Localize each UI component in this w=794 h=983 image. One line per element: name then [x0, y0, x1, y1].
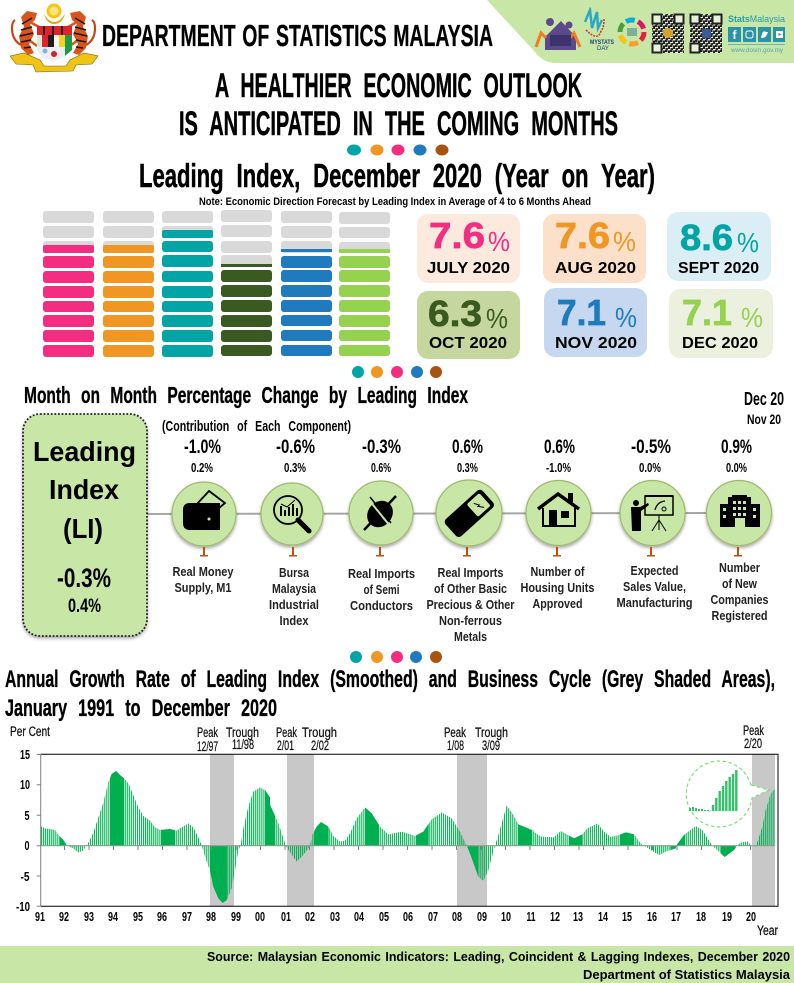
section heading: month on month: Month on Month Percentage Change by Leading Index — [24, 382, 468, 408]
card: July 2020: % — [488, 226, 510, 257]
component: Expected Sales Value, Manufacturing: 0.0% — [639, 460, 661, 475]
card: Nov 2020: NOV 2020 — [555, 335, 637, 352]
icon: presenter — [631, 495, 673, 531]
x axis labels: 05 — [379, 909, 389, 924]
component: Number of Housing Units Approved: 0.6% — [544, 437, 575, 458]
component: Bursa Malaysia Industrial Index: -0.6% — [276, 437, 315, 458]
icon: QR code one — [652, 14, 684, 53]
peak and trough labels: Trough — [302, 725, 337, 740]
gauge: November — [281, 211, 332, 356]
y axis labels: 0 — [24, 838, 30, 853]
component: Number of Housing Units Approved: Number of — [530, 565, 585, 579]
component: Number of New Companies Registered: Registered — [712, 609, 768, 623]
peak and trough labels: Trough — [226, 725, 259, 740]
x axis labels: 13 — [573, 909, 583, 924]
x axis labels: 00 — [255, 909, 265, 924]
axes — [37, 754, 778, 906]
card: Sept 2020 — [667, 212, 771, 281]
component: Real Imports of Other Basic Precious and Non-ferrous Metals: Non-ferrous — [439, 614, 502, 628]
component: Number of New Companies Registered: of New — [722, 577, 757, 591]
header title: DEPARTMENT OF STATISTICS MALAYSIA — [102, 18, 493, 53]
x axis labels: 01 — [281, 909, 291, 924]
section heading: annual growth rate: January 1991 to December 2020 — [5, 695, 277, 722]
component: Real Imports of Other Basic Precious and Non-ferrous Metals: 0.6% — [452, 437, 483, 458]
x axis labels: 19 — [722, 909, 732, 924]
x axis labels: 09 — [477, 909, 487, 924]
growth bars — [41, 771, 774, 903]
component: Number of New Companies Registered: Number — [719, 561, 760, 575]
icon: census logo — [536, 18, 580, 50]
peak and trough labels: Peak — [444, 725, 466, 740]
peak and trough labels: Peak — [276, 725, 297, 740]
x axis labels — [35, 909, 778, 938]
component: Bursa Malaysia Industrial Index: Index — [280, 614, 309, 628]
card: Dec 2020: DEC 2020 — [682, 335, 758, 352]
component: Real Imports of Semi Conductors: of Semi — [364, 583, 400, 597]
card: Aug 2020 — [543, 214, 646, 283]
peak and trough labels: 3/09 — [482, 738, 500, 753]
card: Oct 2020: % — [486, 303, 508, 334]
ribbon — [10, 53, 98, 72]
x axis labels: 94 — [108, 909, 119, 924]
gauge: October — [221, 210, 272, 356]
peak and trough labels: 2/20 — [744, 736, 762, 751]
component: Real Money Supply: 0.2% — [191, 460, 213, 475]
component: Number of Housing Units Approved: -1.0% — [546, 460, 571, 475]
panel: Leading Index total: 0.4% — [68, 596, 101, 617]
x axis labels: Year — [757, 923, 778, 938]
component: Number of Housing Units Approved: Approved — [532, 597, 582, 611]
StatsMalaysia social block — [728, 14, 786, 54]
component: Bursa Malaysia Industrial Index: Bursa — [279, 566, 310, 580]
card: July 2020 — [417, 214, 520, 283]
peak and trough labels: Peak — [197, 725, 218, 740]
component: Expected Sales Value, Manufacturing: Expected — [630, 564, 678, 578]
card: Sept 2020: 8.6 — [680, 217, 733, 258]
card: Nov 2020: % — [615, 302, 637, 333]
connector line — [147, 513, 708, 514]
x axis labels: 08 — [452, 909, 462, 924]
component: Real Imports of Semi Conductors: Conductors — [350, 599, 413, 613]
monthly cards — [417, 212, 773, 359]
component: Real Imports of Other Basic Precious and Non-ferrous Metals: 0.3% — [457, 460, 478, 475]
chart: leading index growth and business cycle — [10, 723, 778, 938]
component: Real Imports of Semi Conductors: -0.3% — [362, 437, 401, 458]
component: Real Imports of Other Basic Precious and Non-ferrous Metals: Real Imports — [438, 566, 504, 580]
footer band: Department of Statistics Malaysia — [583, 967, 791, 982]
component: Number of Housing Units Approved — [520, 437, 595, 611]
panel: Leading Index total: (LI) — [63, 513, 103, 544]
y axis labels: 15 — [20, 747, 30, 762]
card: July 2020: 7.6 — [429, 215, 485, 256]
icon: QR code two — [690, 14, 722, 53]
x axis labels: 97 — [182, 909, 192, 924]
y axis labels: 5 — [24, 808, 30, 823]
StatsMalaysia social block: f — [732, 28, 738, 42]
panel: Leading Index total: Index — [49, 474, 119, 505]
gauge: December — [339, 212, 390, 356]
component: Bursa Malaysia Industrial Index: Malaysia — [272, 582, 317, 596]
x axis labels: 17 — [671, 909, 681, 924]
x axis labels: 18 — [696, 909, 706, 924]
x axis labels: 92 — [59, 909, 69, 924]
component: Real Imports of Semi Conductors: Real Imports — [348, 567, 415, 581]
x axis labels: 11 — [526, 909, 536, 924]
icon: MyStats Day logo: MYSTATS — [590, 39, 615, 46]
callout: zoomed recent bars — [686, 761, 769, 827]
component: Real Imports of Semi Conductors: 0.6% — [371, 460, 391, 475]
StatsMalaysia social block: www.dosm.gov.my — [730, 48, 783, 54]
panel: Leading Index total: Leading — [33, 436, 136, 467]
right tiger — [68, 11, 95, 55]
x axis labels: 02 — [305, 909, 315, 924]
y axis labels: -10 — [16, 899, 30, 914]
component: Expected Sales Value, Manufacturing: Manufacturing — [616, 596, 692, 610]
component: Number of Housing Units Approved: Housing Units — [520, 581, 595, 595]
peak and trough labels: 2/01 — [277, 738, 294, 753]
component: Real Imports of Other Basic Precious and Non-ferrous Metals: Metals — [454, 630, 487, 644]
card: Sept 2020: SEPT 2020 — [678, 260, 759, 277]
x axis labels: 10 — [501, 909, 511, 924]
x axis labels: 03 — [330, 909, 340, 924]
x axis labels: 15 — [622, 909, 632, 924]
left tiger — [12, 11, 39, 55]
icon: semiconductor — [362, 496, 398, 532]
x axis labels: 91 — [35, 909, 45, 924]
card: Oct 2020: 6.3 — [428, 293, 482, 334]
icon: buildings — [720, 495, 760, 527]
peak and trough labels: Trough — [475, 725, 508, 740]
card: Dec 2020 — [669, 289, 773, 358]
card: Oct 2020 — [417, 291, 520, 359]
x axis labels: 93 — [84, 909, 94, 924]
card: Oct 2020: OCT 2020 — [429, 335, 507, 352]
component: Real Imports of Other Basic Precious and Non-ferrous Metals — [426, 437, 515, 644]
peak and trough labels — [197, 723, 764, 754]
shield — [37, 26, 72, 35]
x axis labels: 16 — [647, 909, 657, 924]
component: Real Imports of Other Basic Precious and Non-ferrous Metals: Precious & Other — [426, 598, 515, 612]
component: Bursa Malaysia Industrial Index: Industrial — [269, 598, 319, 612]
component: Number of New Companies Registered: Companies — [710, 593, 769, 607]
panel: Leading Index total — [23, 414, 147, 636]
component: Real Imports of Other Basic Precious and Non-ferrous Metals: of Other Basic — [434, 582, 507, 596]
icon: Malaysian coat of arms — [10, 4, 98, 72]
y axis labels: -5 — [20, 869, 30, 884]
panel: Leading Index total: -0.3% — [57, 563, 111, 593]
icon: SDG wheel — [620, 20, 644, 44]
gauge: September — [162, 211, 213, 357]
x axis labels: 95 — [133, 909, 143, 924]
decorative dots row one — [347, 144, 448, 156]
x axis labels: 99 — [231, 909, 241, 924]
legend: Dec 20 / Nov 20: Nov 20 — [747, 411, 781, 427]
component: Number of New Companies Registered — [706, 437, 772, 623]
component: Number of New Companies Registered: 0.9% — [721, 437, 752, 458]
peak and trough labels: Peak — [743, 723, 764, 738]
x axis labels: 12 — [550, 909, 560, 924]
component: Bursa Malaysia Industrial Index: 0.3% — [284, 460, 306, 475]
section heading: annual growth rate — [5, 666, 775, 722]
chart: leading index growth and business cycle: Per Cent — [10, 724, 50, 739]
component: Real Money Supply: Supply, M1 — [174, 581, 232, 595]
y axis labels — [16, 747, 30, 914]
component: Number of New Companies Registered: 0.0% — [726, 460, 747, 475]
decorative dots row two — [352, 366, 442, 378]
legend: Dec 20 / Nov 20 — [744, 389, 784, 427]
header green banner — [487, 0, 794, 63]
peak and trough labels: 11/98 — [232, 737, 254, 752]
card: July 2020: JULY 2020 — [427, 260, 510, 277]
card: Aug 2020: AUG 2020 — [555, 260, 636, 277]
card: Aug 2020: 7.6 — [555, 215, 610, 256]
gauge: July — [43, 211, 94, 357]
icon: magnifier chart — [274, 496, 309, 531]
card: Sept 2020: % — [737, 227, 759, 258]
recession bands — [210, 754, 775, 906]
header logos — [536, 10, 786, 54]
StatsMalaysia social block: StatsMalaysia — [728, 14, 786, 25]
footer band — [0, 946, 794, 983]
decorative dots row three — [350, 651, 442, 663]
card: Dec 2020: 7.1 — [682, 292, 732, 333]
component: Expected Sales Value, Manufacturing — [616, 437, 692, 610]
component: Real Money Supply — [172, 437, 236, 595]
x axis labels: 14 — [598, 909, 609, 924]
x axis labels: 98 — [206, 909, 216, 924]
icon: MyStats Day logo: DAY — [597, 46, 609, 52]
component: Expected Sales Value, Manufacturing: Sales Value, — [623, 580, 686, 594]
main headline — [179, 67, 618, 143]
component: Expected Sales Value, Manufacturing: -0.5% — [631, 437, 671, 458]
note: Note: Economic Direction Forecast by Leading Index in Average of 4 to 6 Months Ahead — [199, 196, 591, 208]
x axis labels: 20 — [746, 909, 756, 924]
card: Dec 2020: % — [741, 302, 763, 333]
x axis labels: 04 — [354, 909, 365, 924]
x axis labels: 07 — [428, 909, 438, 924]
component: Real Imports of Semi Conductors — [348, 437, 415, 613]
component: Bursa Malaysia Industrial Index — [261, 437, 323, 628]
component: Real Money Supply: -1.0% — [184, 437, 221, 458]
peak and trough labels: 1/08 — [447, 738, 464, 753]
icon: wallet — [183, 491, 225, 530]
icon: MyStats Day logo — [585, 10, 615, 52]
x axis labels: 06 — [403, 909, 413, 924]
bar gauges — [43, 210, 390, 357]
y axis labels: 10 — [20, 777, 30, 792]
component: Real Money Supply: Real Money — [172, 565, 234, 579]
icon: house — [538, 493, 579, 526]
peak and trough labels: 2/02 — [311, 738, 329, 753]
x axis labels: 96 — [157, 909, 167, 924]
card: Aug 2020: % — [613, 226, 636, 257]
card: Nov 2020: 7.1 — [557, 292, 606, 333]
card: Nov 2020 — [544, 288, 647, 357]
subheading: contribution: (Contribution of Each Component) — [162, 418, 351, 435]
peak and trough labels: 12/97 — [197, 739, 218, 754]
gauge: August — [103, 211, 154, 357]
icon: metal bar — [443, 488, 496, 539]
